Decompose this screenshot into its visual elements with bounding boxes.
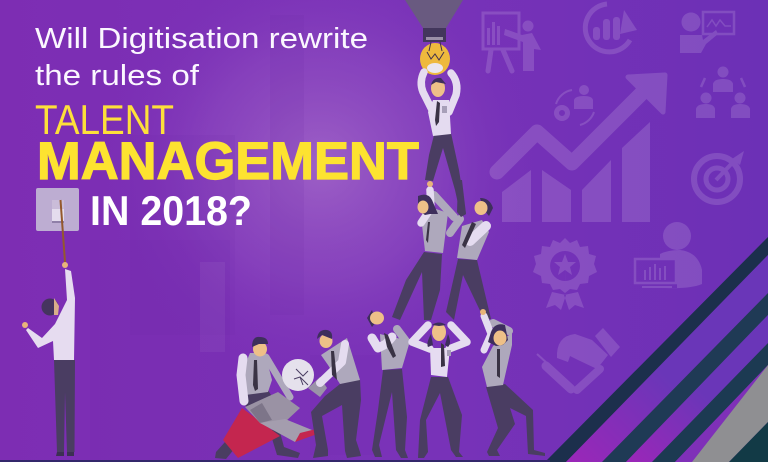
icon: growth chart with arrow bbox=[497, 75, 665, 222]
figure: middle right man bbox=[446, 180, 493, 320]
heading line: Will Digitisation rewrite: Will Digitisation rewrite bbox=[35, 23, 368, 55]
bottom edge line bbox=[0, 460, 550, 462]
figure: man on left opening box bbox=[215, 337, 300, 459]
figure: middle left man bbox=[392, 181, 454, 320]
figure: light bulb held by men bbox=[282, 359, 327, 397]
icon: team hierarchy bbox=[696, 66, 750, 118]
background icon set bbox=[483, 4, 750, 390]
icon: gear and person cycle bbox=[556, 85, 594, 125]
icon: wall light switch bbox=[36, 188, 79, 231]
figure: bottom row man looking up bbox=[367, 310, 410, 458]
icon: handshake bbox=[537, 328, 620, 390]
icon: person with monitor bbox=[635, 222, 702, 288]
heading line: MANAGEMENT: MANAGEMENT bbox=[37, 132, 419, 191]
figure: bottom row right man bbox=[480, 309, 545, 456]
heading line: IN 2018?: IN 2018? bbox=[90, 187, 252, 234]
icon: presenter with screen bbox=[680, 12, 734, 53]
title bbox=[35, 23, 419, 234]
corner diagonal stripes bbox=[545, 237, 768, 462]
figure: bottom row centre man bbox=[412, 322, 467, 458]
background city buildings bbox=[90, 15, 380, 460]
figure: ceiling lamp and bulb bbox=[405, 0, 463, 75]
heading line: TALENT: TALENT bbox=[35, 96, 174, 143]
icon: presenter at chart board bbox=[483, 13, 541, 71]
figure: man on right lifting bulb bbox=[311, 330, 361, 458]
heading line: the rules of: the rules of bbox=[35, 60, 200, 92]
figure: man pulling switch with stick bbox=[22, 200, 75, 456]
figure: red box with grey flaps bbox=[223, 392, 320, 458]
figure: top man holding bulb bbox=[421, 72, 466, 217]
icon: target with arrow bbox=[694, 151, 744, 202]
icon: circular arrow with bars bbox=[585, 4, 637, 52]
icon: award badge bbox=[533, 238, 597, 310]
